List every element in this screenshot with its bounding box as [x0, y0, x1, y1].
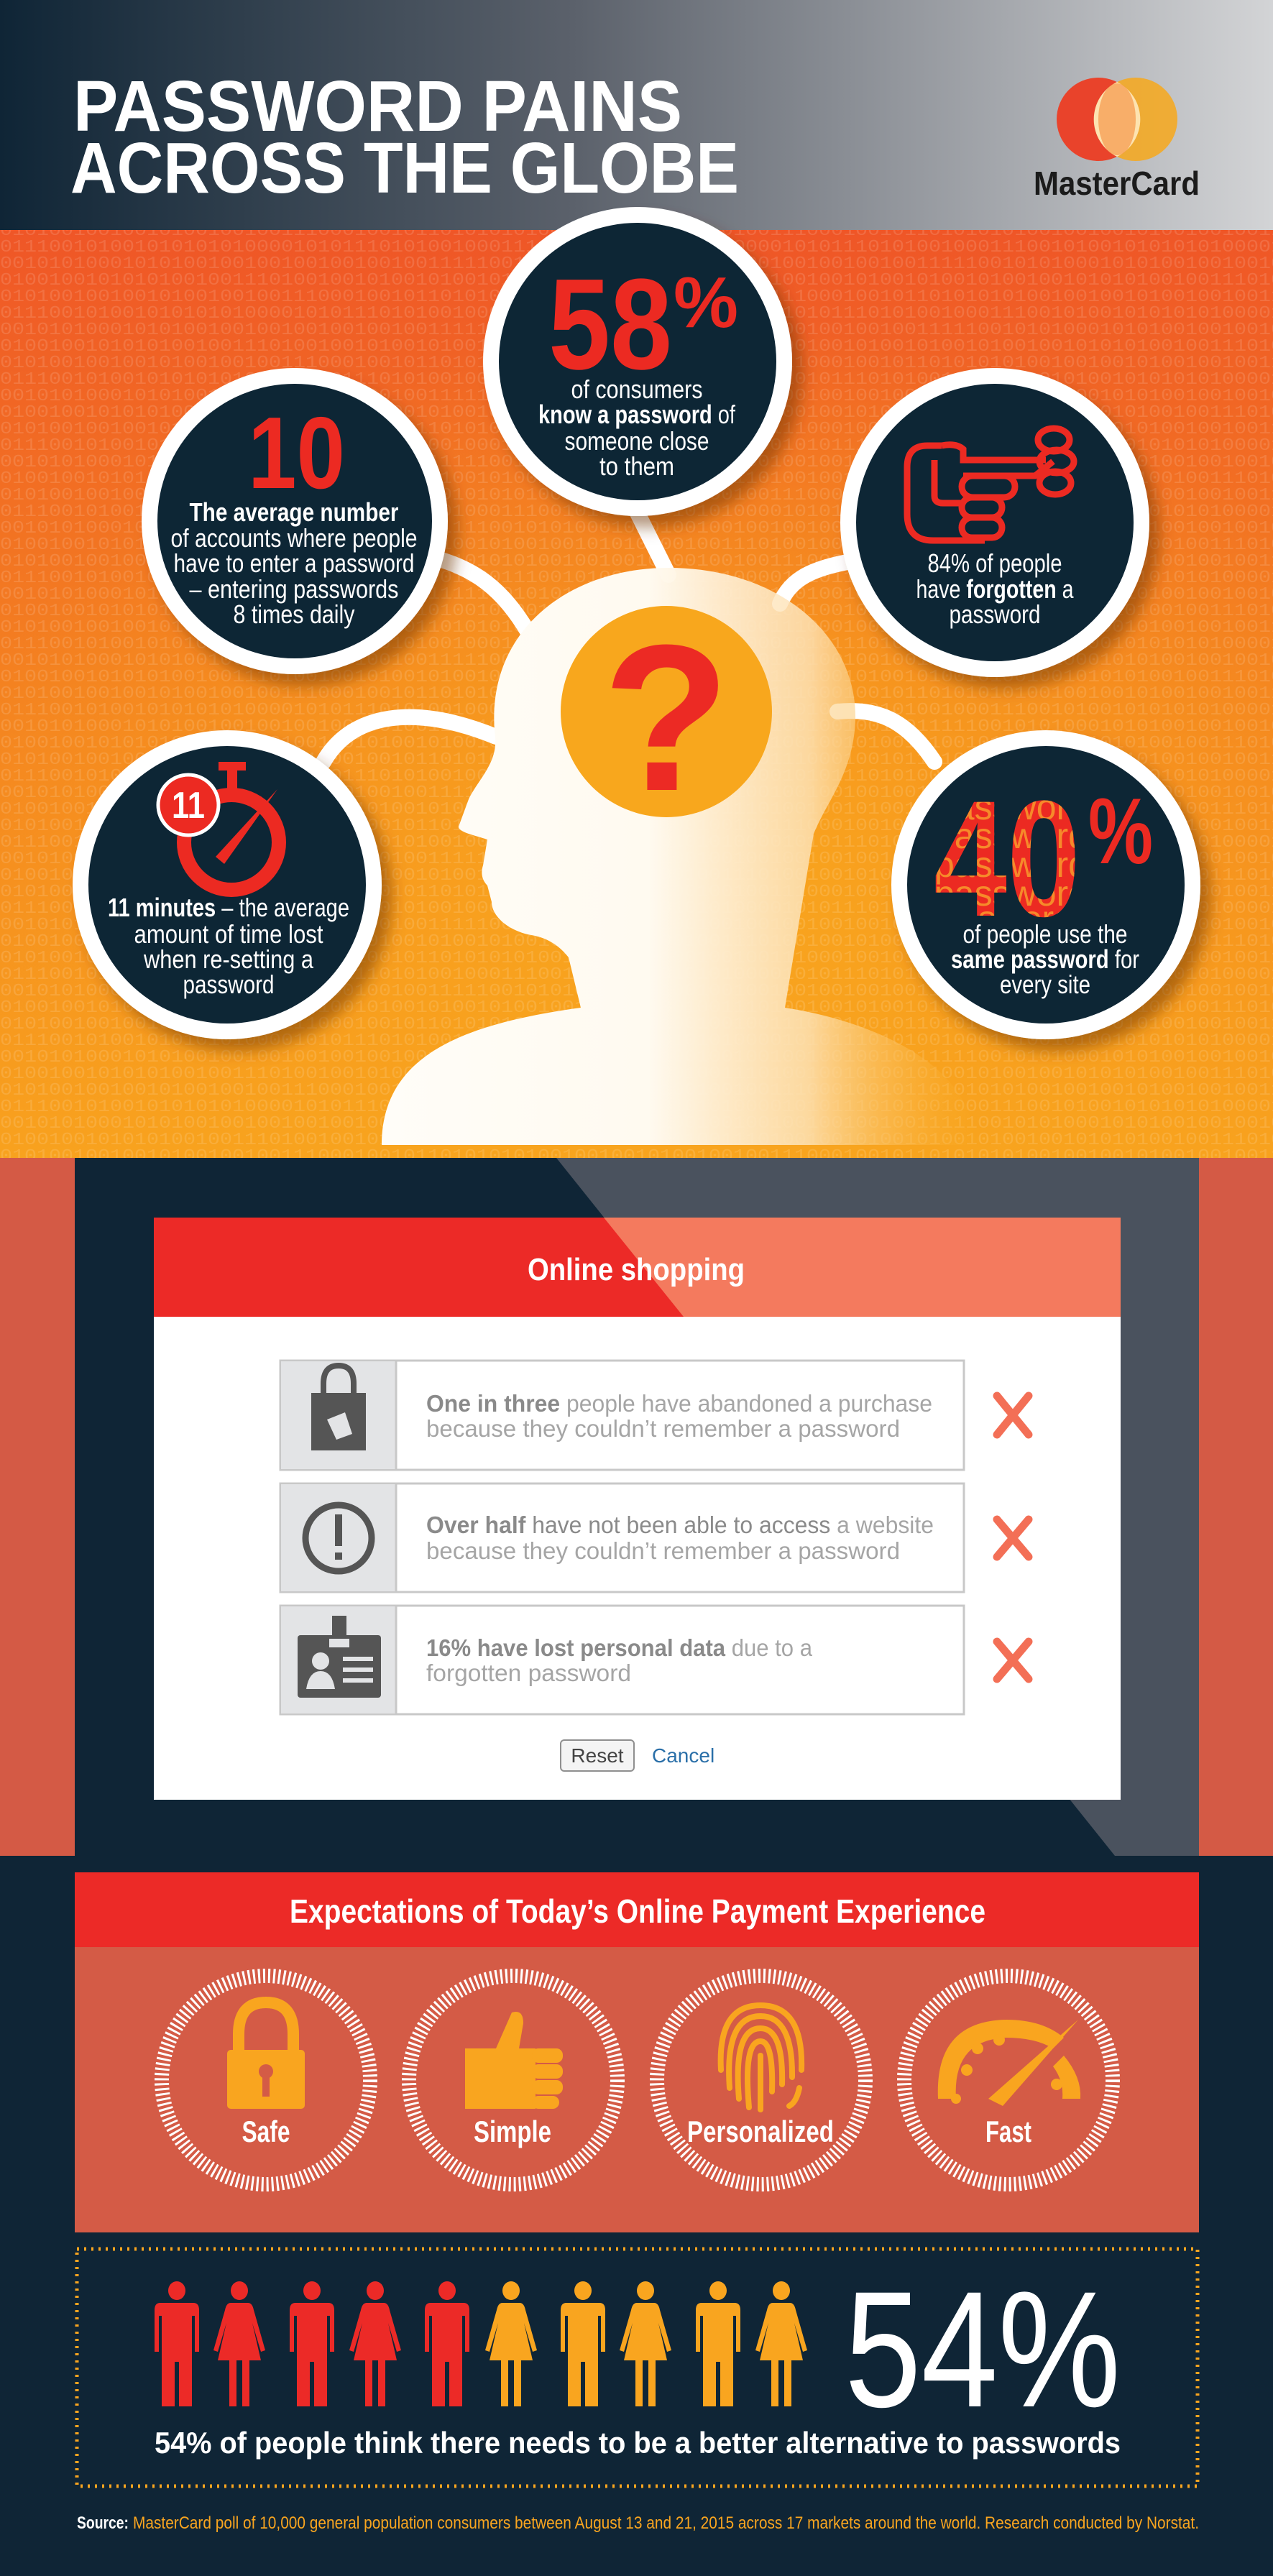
icon: fingerprint	[721, 2005, 801, 2110]
buttons: reset cancel: Cancel	[652, 1744, 714, 1767]
icon: id badge	[298, 1616, 381, 1698]
panel: 11 minutes circle: amount of time lost	[134, 919, 323, 949]
heading: online shopping: Online shopping	[528, 1252, 745, 1287]
panel: 54% alternative	[77, 2249, 1198, 2486]
panel: 40% same password circle: password	[934, 787, 1088, 827]
orange background with binary pattern	[0, 230, 1273, 1161]
source footnote: Source:	[77, 2513, 129, 2533]
connector lines	[323, 503, 934, 762]
icon: shopping bag	[311, 1366, 366, 1450]
panel: 40% same password circle: 40	[934, 766, 1080, 951]
panel: 40% same password circle: of people use the	[963, 919, 1127, 949]
panel: 58% circle	[483, 207, 792, 516]
panel: 10 accounts circle: have to enter a password	[174, 548, 414, 578]
panel: 10 accounts circle: 10	[248, 396, 345, 510]
panel: 40% same password circle: every site	[1000, 970, 1090, 999]
panel: 58% circle: to them	[599, 451, 674, 481]
header background	[0, 0, 1273, 230]
panel: expectations icons: Simple	[474, 2115, 551, 2148]
heading: expectations	[75, 1872, 1199, 1947]
panel: expectations icons	[75, 1947, 1199, 2232]
row: personal data: 16% have lost personal data due to a	[426, 1634, 813, 1661]
icon: question mark circle	[561, 602, 772, 834]
panel: 11 minutes circle	[73, 730, 382, 1039]
panel: 84% forgotten circle: password	[949, 599, 1041, 629]
panel: 58% circle: know a password of	[538, 400, 736, 429]
panel: 10 accounts circle: 8 times daily	[233, 599, 355, 629]
panel: 40% same password circle	[891, 730, 1200, 1039]
panel: expectations icons: Personalized	[687, 2115, 834, 2148]
panel: 58% circle: 58	[548, 252, 672, 397]
row: abandoned purchase: because they couldn’t remember a password	[426, 1415, 900, 1442]
icon: exclamation	[305, 1505, 372, 1571]
panel: 84% forgotten circle	[840, 368, 1149, 677]
panel: 40% same password circle: password	[920, 898, 1074, 939]
panel: 10 accounts circle: – entering passwords	[190, 574, 398, 604]
logo: MasterCard: MasterCard	[1034, 165, 1200, 202]
row: website access	[280, 1484, 964, 1592]
expectations section background	[0, 1856, 1273, 2576]
row: website access: Over half have not been able to access a website	[426, 1512, 934, 1538]
row: abandoned purchase	[280, 1361, 964, 1470]
panel: 40% same password circle: password	[934, 845, 1088, 885]
panel: 40% same password circle: password	[934, 873, 1088, 914]
panel: 58% circle: someone close	[565, 426, 709, 456]
panel: expectations icons: Safe	[242, 2115, 290, 2148]
panel: 10 accounts circle	[142, 368, 448, 674]
panel: 84% forgotten circle: 84% of people	[927, 548, 1062, 578]
title	[70, 66, 739, 208]
people icons	[155, 2281, 807, 2406]
head silhouette	[382, 568, 975, 1145]
panel: 40% same password circle: same password for	[951, 944, 1139, 974]
row: personal data	[280, 1606, 964, 1714]
online shopping section background	[0, 1158, 1273, 1856]
icon: question mark circle: ?	[602, 602, 730, 834]
title: PASSWORD PAINS	[73, 66, 682, 147]
icon: speedometer	[938, 2020, 1080, 2106]
panel: 40% same password circle: %	[1088, 778, 1153, 883]
panel: 58% circle: %	[674, 262, 738, 343]
panel: 10 accounts circle: The average number	[190, 497, 398, 527]
icon: x marks	[997, 1396, 1029, 1679]
logo: MasterCard	[1034, 78, 1200, 202]
heading: expectations: Expectations of Today’s Online Payment Experience	[290, 1892, 985, 1930]
icon: stopwatch	[158, 762, 279, 890]
buttons: reset cancel: Reset	[571, 1744, 624, 1767]
row: website access: because they couldn’t remember a password	[426, 1537, 900, 1564]
panel: 10 accounts circle: of accounts where people	[171, 523, 417, 553]
icon: stopwatch: 11	[172, 785, 205, 827]
row: abandoned purchase: One in three people have abandoned a purchase	[426, 1390, 932, 1417]
buttons: reset cancel	[561, 1740, 714, 1771]
icon: lock	[227, 2002, 305, 2109]
panel: 40% same password circle: password	[934, 816, 1088, 856]
icon: hand with string	[907, 428, 1074, 540]
row: personal data: forgotten password	[426, 1660, 631, 1686]
caption: 54% of people think there needs to be a better alternative to passwords	[155, 2426, 1121, 2460]
panel: 11 minutes circle: password	[183, 970, 275, 999]
title: ACROSS THE GLOBE	[70, 128, 739, 208]
panel: 11 minutes circle: 11 minutes – the average	[108, 893, 349, 922]
panel: 11 minutes circle: when re-setting a	[143, 944, 314, 974]
panel: expectations icons: Fast	[985, 2115, 1031, 2148]
panel: online shopping window	[154, 1218, 1121, 1800]
icon: thumbs up	[465, 2012, 563, 2109]
panel: 84% forgotten circle: have forgotten a	[916, 574, 1074, 604]
heading: online shopping	[154, 1218, 1121, 1317]
big number 54%: 54%	[845, 2257, 1121, 2442]
panel: 58% circle: of consumers	[571, 374, 703, 404]
